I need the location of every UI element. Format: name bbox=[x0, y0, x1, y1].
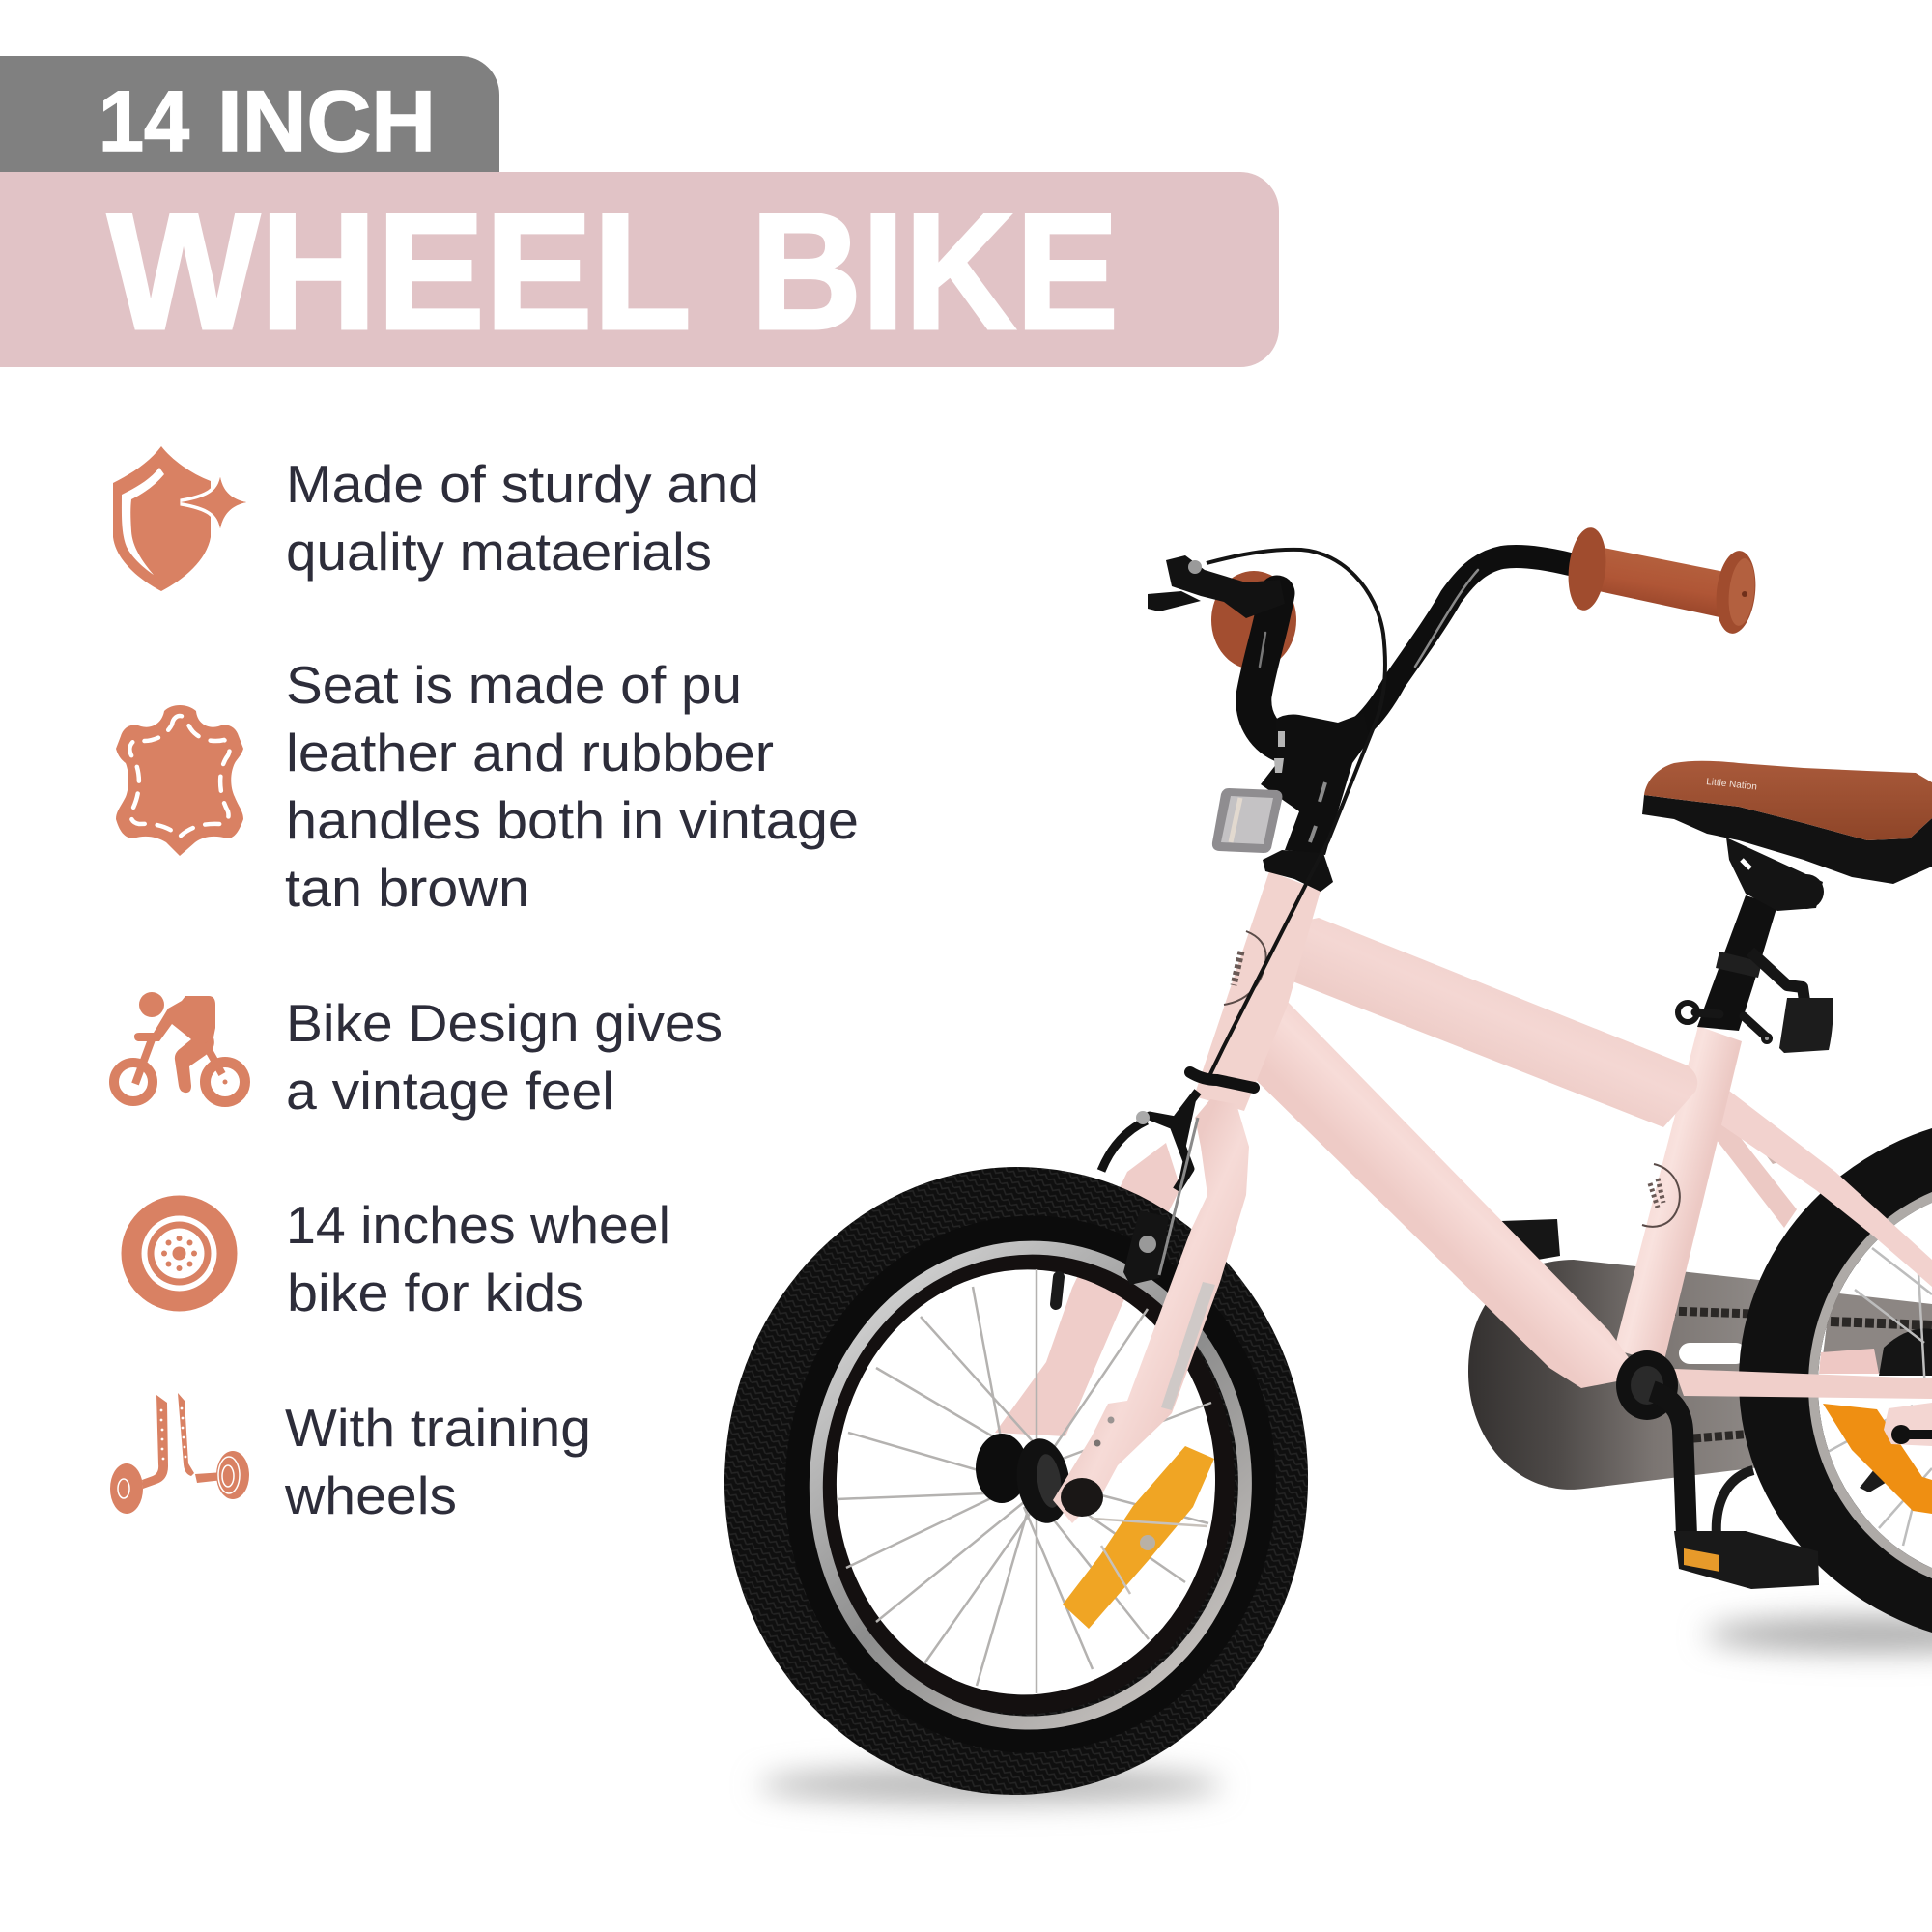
stem bbox=[1261, 713, 1370, 855]
text: 14 inch wheel: 14 inches wheel bbox=[286, 1195, 670, 1255]
icon: wheel bbox=[122, 1196, 238, 1312]
seat post bbox=[1678, 838, 1824, 1042]
text: sturdy materials: Made of sturdy and bbox=[286, 454, 759, 514]
rear reflector bbox=[1823, 1404, 1932, 1514]
text: vintage design: a vintage feel bbox=[286, 1061, 614, 1121]
handlebar bbox=[1254, 556, 1570, 749]
feature 3: vintage design bbox=[114, 992, 723, 1121]
front wheel bbox=[713, 1156, 1320, 1805]
rear wheel interior bbox=[1819, 1293, 1932, 1492]
left grip (behind bar) bbox=[1211, 571, 1296, 669]
icon: leather hide bbox=[116, 705, 243, 856]
text: seat and handles bbox=[285, 655, 859, 918]
icon: training wheels bbox=[110, 1393, 249, 1514]
heading banner: wheel bike bbox=[0, 172, 1279, 367]
icon: child on balance bike bbox=[114, 992, 245, 1101]
frame bbox=[1194, 871, 1932, 1420]
saddle: Little Nation bbox=[1706, 777, 1757, 793]
brake lever bbox=[1148, 555, 1285, 618]
headset bbox=[1263, 850, 1333, 892]
heading banner: wheel bike: WHEEL bbox=[107, 179, 692, 364]
bottom bracket bbox=[1616, 1350, 1678, 1420]
chain guard bbox=[1468, 1260, 1768, 1490]
brake cable bbox=[1207, 550, 1385, 1082]
cable clamp bbox=[1190, 1072, 1254, 1088]
brake bbox=[1056, 1092, 1198, 1304]
rear wheel bbox=[1739, 1115, 1932, 1646]
rear dropout bbox=[1884, 1403, 1932, 1446]
text: 14 inch wheel: bike for kids bbox=[287, 1263, 583, 1322]
saddle bbox=[1642, 761, 1932, 884]
text: vintage design bbox=[286, 993, 723, 1121]
text: seat and handles: tan brown bbox=[285, 858, 529, 918]
top tube bbox=[1288, 918, 1697, 1127]
right grip bbox=[1565, 526, 1759, 636]
feature 2: seat and handles bbox=[116, 655, 859, 918]
heading banner: 14 inch bbox=[0, 56, 499, 172]
text: sturdy materials bbox=[286, 454, 759, 582]
text: vintage design: Bike Design gives bbox=[286, 993, 723, 1053]
rear spokes bbox=[1828, 1248, 1932, 1546]
text: seat and handles: handles both in vintage bbox=[286, 790, 859, 850]
far pedal bbox=[1501, 1219, 1560, 1262]
down tube bbox=[1253, 1001, 1642, 1388]
text: sturdy materials: quality mataerials bbox=[286, 522, 712, 582]
head tube bbox=[1194, 871, 1321, 1111]
icon: shield with sparkle bbox=[113, 446, 246, 591]
text: 14 inch wheel bbox=[286, 1195, 670, 1322]
text: seat and handles: Seat is made of pu bbox=[286, 655, 742, 715]
spokes bbox=[837, 1269, 1211, 1693]
rear seat reflector bbox=[1779, 998, 1833, 1053]
far fork leg bbox=[995, 1143, 1180, 1436]
bike illustration bbox=[713, 526, 1932, 1805]
crank and pedal bbox=[1652, 1391, 1819, 1589]
feature 4: 14 inch wheel bbox=[122, 1195, 670, 1322]
axle nut bbox=[1061, 1478, 1103, 1517]
front reflector bbox=[1063, 1446, 1214, 1629]
chain stay bbox=[1674, 1369, 1932, 1399]
heading banner: 14 inch: INCH bbox=[217, 72, 436, 169]
feature 1: sturdy materials bbox=[113, 446, 759, 591]
seat stay bbox=[1715, 1091, 1932, 1287]
text: training wheels: wheels bbox=[284, 1465, 457, 1525]
text: seat and handles: leather and rubbber bbox=[286, 723, 774, 782]
text: training wheels bbox=[284, 1398, 591, 1525]
front hub bbox=[976, 1434, 1075, 1526]
far crank bbox=[1717, 1470, 1753, 1536]
heading banner: 14 inch: 14 bbox=[99, 72, 189, 169]
seat tube bbox=[1614, 1026, 1742, 1364]
inner stay bbox=[1710, 1111, 1797, 1228]
ground shadows bbox=[758, 1617, 1932, 1803]
text: training wheels: With training bbox=[285, 1398, 591, 1458]
near fork leg bbox=[1053, 1099, 1249, 1523]
front reflector on stem bbox=[1212, 788, 1282, 853]
heading banner: wheel bike: BIKE bbox=[751, 179, 1119, 364]
feature 5: training wheels bbox=[110, 1393, 591, 1525]
